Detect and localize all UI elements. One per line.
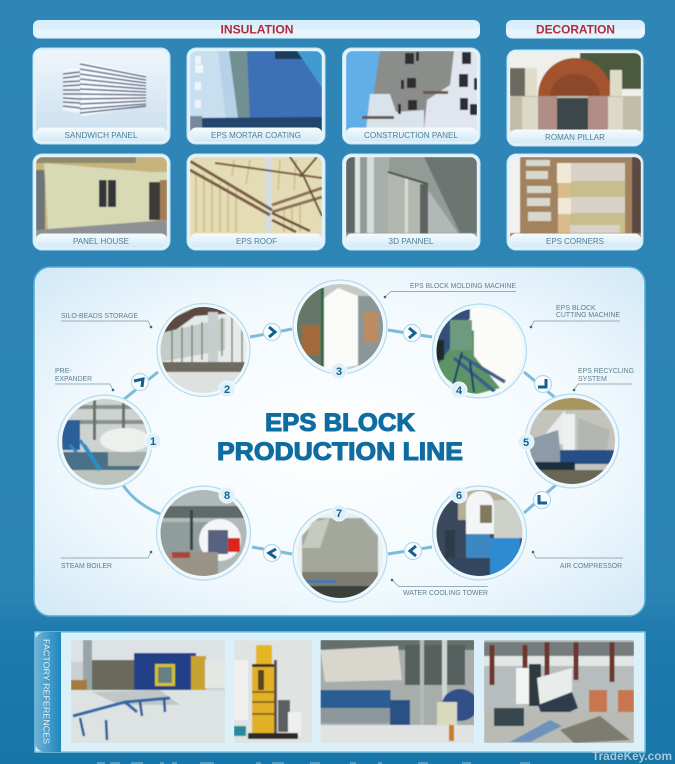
label: silo-beads storage: SILO-BEADS STORAGE <box>61 313 138 320</box>
label: eps block cutting machine: EPS BLOCK <box>556 305 596 312</box>
label: eps block cutting machine <box>530 305 620 328</box>
card: eps roof <box>187 154 325 250</box>
photo: production hall <box>320 640 478 743</box>
card: roman pillar: ROMAN PILLAR <box>545 133 605 142</box>
card: roman pillar <box>507 50 643 146</box>
arrow 6 to 7 <box>404 542 422 560</box>
stage 2 silo-beads storage <box>157 304 250 397</box>
stage 5 eps recycling system <box>518 394 619 488</box>
stage 7 water cooling tower: 7 <box>336 508 342 520</box>
label: steam boiler <box>61 551 152 570</box>
label: pre-expander: EXPANDER <box>55 376 92 383</box>
label: eps block molding machine <box>384 283 516 298</box>
arrow 2 to 3 <box>264 324 280 340</box>
heading bar: decoration <box>506 20 645 38</box>
photo: cutting workshop <box>484 640 634 743</box>
arrow 3 to 4 <box>404 324 420 342</box>
heading bar: insulation: INSULATION <box>220 24 294 36</box>
heading bar: insulation <box>33 20 480 38</box>
label: water cooling tower: WATER COOLING TOWER <box>403 590 488 597</box>
arrow 1 to 2 <box>132 374 148 390</box>
card: construction panel <box>342 48 480 144</box>
arrow 7 to 8 <box>264 544 280 562</box>
card: panel house <box>33 154 170 250</box>
card: 3d pannel <box>342 154 480 250</box>
label: silo-beads storage <box>61 313 152 328</box>
photo: vertical block machine <box>234 640 312 743</box>
card: eps corners: EPS CORNERS <box>546 237 604 246</box>
stage 3 eps block molding machine: 3 <box>336 366 342 378</box>
tab: factory references <box>35 632 61 752</box>
label: eps block molding machine: EPS BLOCK MOLDING MACHINE <box>410 283 516 290</box>
label: air compressor <box>532 551 623 570</box>
label: pre-expander: PRE- <box>55 368 72 375</box>
stage 6 air compressor: 6 <box>456 490 462 502</box>
label: steam boiler: STEAM BOILER <box>61 563 112 570</box>
card: eps mortar coating: EPS MORTAR COATING <box>211 131 301 140</box>
photo: molding machine <box>71 640 225 743</box>
card: eps corners <box>507 154 643 250</box>
cropped bottom text line <box>97 762 530 764</box>
heading bar: decoration: DECORATION <box>536 24 615 36</box>
stage 6 air compressor <box>432 486 528 580</box>
label: eps block cutting machine: CUTTING MACHINE <box>556 312 620 319</box>
stage 8 steam boiler <box>156 486 250 580</box>
label: water cooling tower <box>391 579 488 597</box>
stage 4 eps block cutting machine <box>432 304 526 398</box>
stage 1 pre-expander: 1 <box>150 436 156 448</box>
title: PRODUCTION LINE <box>217 438 463 466</box>
panel: factory references <box>35 632 645 752</box>
stage 5 eps recycling system: 5 <box>523 437 529 449</box>
stage 1 pre-expander <box>58 395 161 489</box>
card: sandwich panel: SANDWICH PANEL <box>64 131 138 140</box>
card: eps mortar coating <box>187 48 325 144</box>
stage 8 steam boiler: 8 <box>224 490 230 502</box>
label: eps recycling system <box>573 368 634 391</box>
connectors between stages <box>123 329 558 554</box>
card: 3d pannel: 3D PANNEL <box>388 237 434 246</box>
label: pre-expander <box>55 368 114 391</box>
panel: eps block production line <box>34 267 645 616</box>
card: construction panel: CONSTRUCTION PANEL <box>364 131 459 140</box>
label: eps recycling system: SYSTEM <box>578 376 607 383</box>
label: air compressor: AIR COMPRESSOR <box>560 563 622 570</box>
stage 2 silo-beads storage: 2 <box>224 384 230 396</box>
card: sandwich panel <box>33 48 170 144</box>
watermark: tradekey.com: TradeKey.com <box>592 751 672 763</box>
arrow 4 to 5 <box>534 376 552 392</box>
label: eps recycling system: EPS RECYCLING <box>578 368 634 375</box>
card: panel house: PANEL HOUSE <box>73 237 129 246</box>
arrow 5 to 6 <box>534 492 550 508</box>
title: EPS BLOCK <box>265 409 415 437</box>
stage 7 water cooling tower <box>293 505 387 602</box>
tab: factory references: FACTORY REFERENCES <box>42 639 50 744</box>
stage 3 eps block molding machine <box>293 280 387 379</box>
title <box>217 409 463 466</box>
card: eps roof: EPS ROOF <box>236 237 277 246</box>
stage 4 eps block cutting machine: 4 <box>456 385 463 397</box>
